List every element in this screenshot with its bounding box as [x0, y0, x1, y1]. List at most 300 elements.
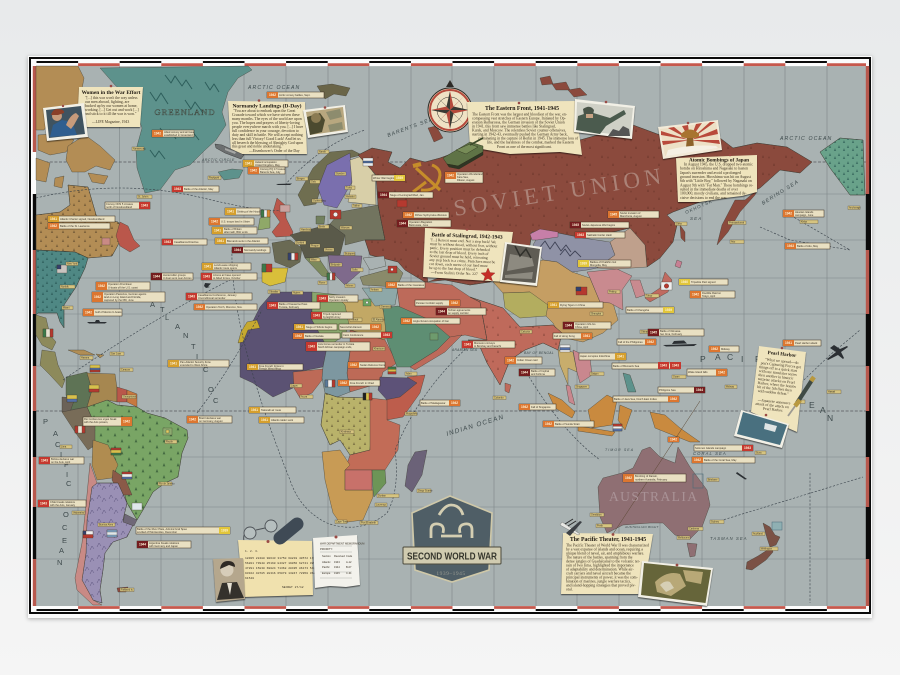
- icon: battleship: [663, 340, 697, 346]
- mexico and central america: [36, 315, 104, 388]
- sea and ocean labels: BERING SEA: [761, 179, 800, 207]
- icon: cipher cylinder: [280, 524, 297, 538]
- paper note: Pacific: [322, 565, 330, 569]
- pin: [466, 228, 468, 231]
- svalbard: [317, 84, 350, 99]
- tag: moscow: 1942: [405, 213, 412, 217]
- small place labels: Oslo: [311, 181, 317, 184]
- tag: argentina: 1944: [139, 543, 146, 547]
- tag: uk west 2: [212, 227, 257, 234]
- australia: [598, 447, 710, 557]
- tag: marianas: [687, 369, 727, 376]
- paper note: [313, 535, 364, 588]
- small place labels: New York: [67, 263, 78, 266]
- tag: iceland: [248, 167, 286, 174]
- tag: quebec 1: 1941: [50, 217, 57, 221]
- small place labels: Khartoum: [374, 348, 384, 351]
- small place labels: Prague: [311, 245, 319, 248]
- tag: burma: 1944: [521, 371, 528, 375]
- small place labels: [60, 147, 861, 592]
- small place labels: Hamburg: [301, 229, 312, 232]
- small place labels: Anchorage: [849, 207, 861, 210]
- small place labels: Budapest: [345, 253, 355, 256]
- small place labels: El Alamein: [373, 319, 385, 322]
- tag: kursk: 1944: [399, 222, 406, 226]
- tag: north atlantic: established in Greenland: [164, 133, 193, 137]
- tag: newfoundland: north of Newfoundland: [106, 205, 133, 209]
- tag: north pacific: Battle of Attu, May: [797, 244, 819, 248]
- tag: south atlantic: Atlantis raider sunk: [271, 418, 294, 422]
- tag: bermuda: [151, 273, 193, 280]
- tag: caroline: [658, 387, 705, 393]
- tag: tripoli: by Eighth Army: [323, 315, 341, 319]
- tag: persia: [401, 318, 460, 324]
- tag: shanghai: Battle of Changsha: [627, 308, 650, 312]
- tag: java: 1942: [545, 422, 552, 426]
- small place labels: Helsinki: [346, 196, 355, 199]
- heading: Pearl Harbor: [767, 351, 797, 359]
- pin: [110, 85, 112, 87]
- tag: azores: [201, 273, 257, 280]
- quote text: and stick to it till the war is won.": [85, 112, 137, 116]
- tag: okinawa: Iwo Jima, February: [660, 332, 683, 336]
- tag: argentina: with Germany and Japan: [149, 544, 178, 548]
- tag: new york approach: [162, 239, 207, 245]
- tag: new guinea: [668, 437, 679, 442]
- tag: mid atlantic: Battle of the Atlantic, May: [184, 187, 214, 191]
- tag: moscow: [403, 212, 449, 218]
- tag: brazil coast: 1942: [189, 418, 196, 422]
- tag: sahara: [306, 342, 370, 351]
- tag: persia: Anglo-Soviet occupation of Iran: [413, 319, 450, 323]
- tag: sumatra: [519, 404, 556, 410]
- year text: 1939–1945: [436, 571, 466, 577]
- newfoundland: [116, 222, 140, 252]
- body text: sulted in the immediate deaths of over: [680, 188, 739, 192]
- map grid: [36, 66, 866, 606]
- tag: us atlantic: 1942: [94, 295, 101, 299]
- tag: philippines: [612, 362, 681, 369]
- new zealand: [746, 523, 780, 570]
- pin: [266, 540, 270, 543]
- tag: india burma: [548, 302, 603, 308]
- tag: west africa: Free French forces in: [259, 364, 284, 368]
- body text: in 1941, this front saw immense battles like Stalingrad,: [472, 124, 556, 130]
- sea and ocean labels: [43, 85, 833, 567]
- tag: coral sea: Solomon Islands campaign: [695, 446, 727, 450]
- sea and ocean labels: ARCTIC CIRCLE: [201, 158, 235, 162]
- country name: soviet union: SOVIET UNION: [452, 163, 665, 221]
- tag: brazil coast: [187, 416, 232, 423]
- small place labels: Johnston: [790, 401, 800, 404]
- small place labels: Berlin: [319, 226, 326, 229]
- tag: finland: 1939: [396, 176, 403, 180]
- tag: argentina: Argentina breaks relations: [149, 541, 180, 545]
- tag: leyte: 1942: [670, 397, 677, 401]
- tag: arabian sea: Monsoon convoys: [474, 341, 496, 345]
- icon: battleship coral sea: [736, 472, 747, 480]
- small place labels: Shanghai: [591, 313, 602, 316]
- tag: sirte: [293, 333, 340, 339]
- tag: mid atlantic: 1943: [174, 187, 181, 191]
- tag: libya north: [317, 295, 358, 302]
- tag: ireland: 1941: [227, 210, 234, 214]
- tag: japan 1: 1940: [681, 280, 688, 284]
- tag: bay of bengal: [505, 357, 542, 364]
- quote text: surprise attacks on Pearl: [758, 377, 795, 385]
- small place labels: Accra: [301, 396, 308, 399]
- small place labels: San Juan: [111, 353, 122, 356]
- tag: philippines: 1943: [660, 364, 667, 368]
- paper note: WAR DEPARTMENT MEMORANDUM: [320, 542, 364, 546]
- body text: rain of Iwo Jima, highlighted the importance: [566, 564, 634, 568]
- quote text: —Eisenhower's Order of the Day: [248, 149, 300, 153]
- desk still life: [213, 520, 364, 602]
- heading: Normandy Landings (D-Day): [232, 102, 302, 110]
- small place labels: Suva: [756, 452, 762, 455]
- tag: coral: [692, 457, 755, 463]
- tag: river plate: [136, 527, 230, 534]
- quote text: any step back is a crime. Panickers must be: [429, 258, 496, 264]
- small place labels: Okha: [676, 223, 682, 226]
- small place labels: Colombo: [494, 397, 504, 400]
- small place labels: Port Elizabeth: [361, 522, 377, 525]
- tag: kursk: [397, 220, 451, 227]
- small place labels: Athens: [346, 285, 354, 288]
- quote text: Harbor, where the bombs: [757, 381, 797, 390]
- tag: tunisia: Tunisia, February: [279, 305, 300, 309]
- tag: coral sea: [694, 445, 753, 451]
- tag: kursk: Belorussia, June: [409, 223, 429, 227]
- greenland: GREENLAND: [155, 107, 215, 117]
- small place labels: Ankara: [371, 289, 379, 292]
- tag: leyte: Battle of Java Sea, Dutch East Indies: [614, 397, 658, 401]
- quote text: —From Stalin's Order No. 227: [430, 271, 478, 276]
- tag: sudan: [348, 362, 386, 368]
- tag: bermuda: U-boat sunk near Azores: [163, 276, 192, 280]
- small place labels: Vienna: [325, 249, 333, 252]
- panel: women in the war effort: [43, 85, 143, 141]
- quote text: full confidence in your courage, devotion to: [232, 129, 299, 134]
- tag: russia north: Kara Sea,: [457, 175, 469, 179]
- paper note: Atlantic: [322, 560, 331, 564]
- icon: glasses: [244, 520, 277, 545]
- quote text: less than full Victory! Good Luck! And let us: [232, 137, 301, 141]
- tag: pacific chile: with the Axis, January: [50, 503, 76, 507]
- tag: libya north: Operation Husky: [329, 298, 349, 302]
- tag: libya north: 1943: [319, 297, 326, 301]
- tag: tehran: 1944: [438, 310, 445, 314]
- photo: soldier pointing: [574, 99, 635, 139]
- tag: casablanca: 1943: [188, 295, 195, 299]
- sea background: [36, 66, 866, 606]
- quote text: things off to a quick start: [759, 365, 798, 373]
- tag: australia: Bombing of Darwin,: [635, 474, 658, 478]
- body text: unique blend of naval, air, and amphibious warfare.: [566, 552, 644, 556]
- body text: of adaptability and determination. While air-: [566, 568, 634, 572]
- tag: arabian sea: 1943: [464, 343, 471, 347]
- tag: philippines: 1943: [672, 364, 679, 368]
- tag: arctic: 1942: [269, 93, 276, 97]
- tag: us atlantic: Operation Pastorius, German agents: [104, 292, 147, 296]
- tag: mid atlantic: [172, 186, 219, 192]
- tag: biscay: Atlantic route opens: [214, 266, 238, 270]
- coded letter: [238, 540, 319, 597]
- icon: tank: [443, 138, 483, 169]
- quote text: [85, 96, 139, 125]
- icon: plane: [827, 345, 848, 360]
- quote text: attack of the attack on: [755, 402, 789, 409]
- tag: gulf of guinea: [249, 407, 296, 413]
- east indies: [548, 393, 700, 442]
- tag: leyte: [613, 396, 679, 402]
- tag: west africa: 1941: [249, 365, 256, 369]
- tag: quebec 2: Battle of the St. Lawrence: [60, 224, 90, 228]
- body text: and island-hopping strategies that proved piv-: [566, 584, 636, 588]
- tag: north atlantic: [152, 130, 195, 137]
- tag: south china sea: [617, 339, 656, 345]
- tag: dakar: 1941: [170, 362, 177, 366]
- tag: new york approach: Casablanca Directive: [174, 240, 199, 244]
- tag: peru: 1942: [123, 420, 130, 424]
- tag: japan 1: Tripartite Pact signed: [691, 280, 716, 284]
- sea and ocean labels: INDIAN OCEAN: [446, 414, 505, 438]
- pin: [518, 102, 520, 104]
- tag: iceland: Barents Sea, July: [260, 170, 281, 174]
- tag: central asia: Soviet-Japanese War begins: [582, 223, 616, 227]
- tag: hong kong: Fall of Hong Kong: [554, 334, 575, 338]
- tag: kursk: Operation Bagration: [409, 220, 433, 224]
- body text: principal instruments of power, it was the com-: [566, 576, 638, 580]
- sea and ocean labels: PACIFIC OCEAN: [43, 417, 72, 567]
- tag: sumatra: Fall of Singapore: [531, 405, 551, 409]
- small place labels: Calcutta: [521, 331, 530, 334]
- body text: compassing vast stretches of Eastern Europe. Initiated by Op-: [472, 116, 566, 120]
- coded letter: 61540: [245, 577, 254, 580]
- quote text: duty and skill in battle. We will accept nothing: [232, 133, 303, 137]
- icon: u-boat atlantic: [87, 320, 107, 324]
- tag: new york approach: 1943: [164, 240, 171, 244]
- tag: hawaii: [783, 340, 821, 346]
- body text: starting in 1942-43, eventually pushed the German Army back,: [472, 132, 568, 138]
- tag: mongolia: Mongolia, May: [590, 263, 608, 267]
- tag: java: [543, 421, 594, 427]
- small place labels: Sofia: [352, 269, 358, 272]
- tag: bermuda: 1944: [153, 275, 160, 279]
- panel: pearl harbor: [734, 346, 814, 448]
- small place labels: Okinawa: [641, 331, 651, 334]
- quote text: then another in historic: [758, 373, 794, 381]
- tag: hawaii: 1941: [785, 341, 792, 345]
- quote text: backed up by our women at home,: [85, 104, 137, 109]
- small place labels: Bergen: [297, 178, 305, 181]
- small place labels: Perth: [597, 525, 603, 528]
- tag: caroline: 1944: [696, 388, 703, 392]
- usa: [36, 250, 88, 328]
- pin: [612, 533, 614, 536]
- small place labels: Lima: [61, 446, 67, 449]
- quote text: with one simulator series: [759, 369, 797, 377]
- paper note: 1945: [334, 571, 340, 575]
- tag: peru: [83, 417, 132, 426]
- body text: In August 1945, the U.S. dropped two atomic: [684, 162, 753, 168]
- body text: by a vast expanse of islands and ocean, requiring a: [566, 548, 643, 552]
- tag: mongolia: [578, 260, 631, 267]
- tag: burma: Battle of Imphal: [531, 369, 549, 373]
- tag: coral: 1942: [694, 458, 701, 462]
- paper note: Europe: [322, 571, 331, 575]
- small place labels: Aden: [406, 373, 412, 376]
- sea and ocean labels: PACIF: [700, 352, 760, 364]
- icon: red star: [481, 268, 495, 281]
- sea and ocean labels: ARCTIC OCEAN: [247, 85, 300, 91]
- tag: newfoundland: Convoy ONS 5 crosses: [106, 202, 134, 206]
- poster sheet: [28, 56, 872, 618]
- tag: north pacific: [785, 243, 830, 249]
- flags: [43, 158, 782, 538]
- panel: normandy landings: [215, 99, 348, 159]
- tag: biscay: [202, 263, 251, 270]
- icon: aircraft: [560, 519, 582, 536]
- tag: mid pacific: Midway: [721, 347, 730, 351]
- map frame: [30, 58, 870, 613]
- tag: okhotsk: 1943: [577, 233, 584, 237]
- tag: west africa: French West Africa: [259, 366, 281, 370]
- tag: britain: [243, 160, 288, 167]
- quote text: panic. Every position must be defended: [430, 246, 490, 252]
- tag: pacific south america: on the Axis, April: [51, 460, 71, 464]
- tag: pacific chile: 1943: [40, 502, 47, 506]
- small place labels: Mogadishu: [406, 413, 418, 416]
- panel: atomic bombings of japan: [658, 120, 757, 202]
- tag: biscay: Lend-Lease shipping: [214, 263, 239, 267]
- tag: river plate: Battle of the River Plate, Admiral Graf Spee: [137, 527, 187, 531]
- tag: somalia: [420, 400, 460, 406]
- heading: Atomic Bombings of Japan: [689, 158, 749, 164]
- tag: marianas: Wake Island falls: [688, 370, 708, 374]
- quote text: you. The hopes and prayers of liberty-loving: [232, 121, 300, 125]
- tag: iraq: 1942: [451, 301, 458, 305]
- tag: dakar: [168, 360, 229, 367]
- small place labels: Sydney: [711, 521, 720, 524]
- body text: The nature of the battles, spanning from the: [566, 556, 633, 560]
- tag: indochina: [579, 353, 626, 360]
- heading: The Pacific Theater, 1941-1945: [570, 537, 646, 543]
- body text: cisive decisions to end the war.: [680, 196, 727, 200]
- tag: north pacific: 1943: [787, 244, 794, 248]
- quote text: Soviet ground must be held, retreating: [429, 254, 488, 261]
- panel: eastern front: [467, 99, 635, 155]
- africa: [238, 292, 427, 523]
- tag: tunisia: Battle of Kasserine Pass: [279, 302, 308, 306]
- coded letter: 18305 22480 90643 31750 68219 40572 17936: [245, 557, 319, 560]
- quote text: [232, 109, 303, 153]
- tag: sahara: Axis forces surrender in Tunisia: [318, 342, 355, 346]
- quote text: [429, 238, 499, 277]
- body text: dense jungles of Guadalcanal to the volcanic ter-: [566, 560, 641, 564]
- tag: pacific south america: 1943: [41, 459, 48, 463]
- tag: morocco: 1942: [196, 305, 203, 309]
- small place labels: Kinshasa: [341, 431, 352, 434]
- alaska: [820, 138, 865, 195]
- tag: ireland: Sinking of the Hood: [237, 210, 260, 214]
- small place labels: Peking: [609, 291, 617, 294]
- asia: [360, 228, 682, 405]
- small place labels: Milan: [311, 259, 317, 262]
- tag: dakar: extended to West Africa: [180, 363, 208, 367]
- body text: 6th with "Little Boy," followed by Nagasaki on: [680, 179, 752, 184]
- paper note: Code: [346, 554, 353, 558]
- vessels and aircraft: [87, 184, 848, 480]
- quote text: be up to the last drop of blood.": [429, 266, 478, 272]
- greenland: [100, 66, 252, 193]
- tag: japan 2: [690, 291, 735, 298]
- small place labels: Saigon: [591, 373, 599, 376]
- small place labels: Wellington: [761, 548, 773, 551]
- coded letter: 1. 2. 3.: [245, 550, 258, 553]
- tag: russia north: [445, 172, 484, 183]
- small place labels: Hawaii: [828, 391, 836, 394]
- tag: peru: Rio Conference urges break: [84, 417, 117, 421]
- paper note: 1943: [334, 560, 340, 564]
- paper note: PRIORITY:: [320, 547, 333, 551]
- tag: south china: [563, 322, 611, 329]
- europe: [258, 150, 385, 286]
- small place labels: Gibraltar: [269, 291, 278, 294]
- tag: arabian sea: to Bombay and Karachi: [474, 344, 501, 348]
- small place labels: Falkland Is.: [121, 589, 134, 592]
- paper note: C-31: [346, 571, 352, 575]
- tag: okinawa: Battle of Okinawa: [660, 329, 681, 333]
- quote text: must be without dread, without fear, without: [430, 242, 498, 249]
- coded letter: 93162 40785 28316 65079 13847 72950 36214: [245, 572, 319, 575]
- small place labels: Midway: [726, 386, 735, 389]
- tag: azores: 1943: [203, 275, 210, 279]
- tag: east coast: 1942: [98, 284, 105, 288]
- tag: uk west 1: U.S. troops land in Ulster: [221, 220, 250, 224]
- tag: tripoli: Tripoli captured: [323, 312, 341, 316]
- title banner: SECOND WORLD WAR: [407, 552, 498, 562]
- sea and ocean labels: TIMOR SEA: [605, 448, 634, 452]
- tag: cairo: Cairo Conference: [343, 333, 364, 337]
- quote text: "You are about to embark upon the Great: [233, 109, 296, 113]
- tag: pacific chile: Chile breaks relations: [50, 500, 76, 504]
- tag: finland: Winter War begins: [373, 176, 395, 180]
- body text: [566, 544, 649, 592]
- iceland: [218, 169, 243, 180]
- tag: okhotsk: [575, 232, 625, 238]
- paper note: B-07: [346, 565, 352, 569]
- tag: south china sea: Fall of the Philippines: [618, 340, 643, 344]
- tag: australia: [623, 474, 686, 482]
- tag: brazil coast: Brazil declares war: [199, 416, 221, 420]
- tag: uk west 2: Battle of Britain: [224, 227, 242, 231]
- photo: jungle troops: [638, 561, 713, 606]
- tag: quebec 1: Atlantic Charter signed, Newfoundland: [60, 217, 105, 221]
- tag: java: Battle of Sunda Strait: [555, 422, 580, 426]
- country name: australia: AUSTRALIA: [609, 489, 697, 504]
- tag: east africa: Free French in Chad: [350, 381, 374, 385]
- tag: pacific chile: [38, 500, 86, 507]
- tag: north atlantic: 1942: [154, 132, 161, 136]
- tag: coral: Battle of the Coral Sea, May: [704, 458, 737, 462]
- quote text: to the last drop of blood. Every inch of: [430, 250, 489, 256]
- tag: uk west 2: 1941: [214, 229, 221, 233]
- tag: hawaii: Pearl Harbor attack: [795, 341, 818, 345]
- icon: fountain pen: [788, 377, 814, 416]
- sea and ocean labels: SEA: [690, 216, 702, 221]
- small place labels: Petropavlovsk: [729, 222, 745, 225]
